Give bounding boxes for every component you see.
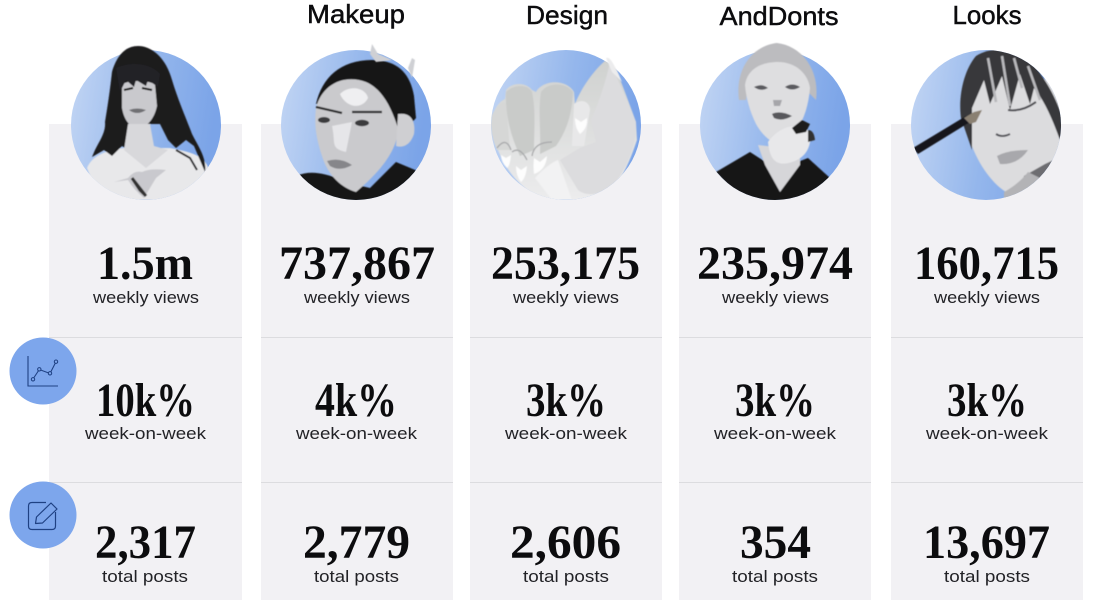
stat column 3: total posts [523, 567, 609, 586]
panel: column 3 [470, 124, 662, 600]
icon: line chart [10, 338, 76, 404]
stat column 5: 13,697 [923, 516, 1050, 569]
stat column 2: total posts [314, 567, 399, 586]
stat column 2: weekly views [303, 288, 410, 307]
stat column 1: week-on-week [84, 424, 207, 443]
finger nail tip [606, 58, 622, 82]
stat column 3 [491, 237, 640, 586]
photo: woman having lipstick applied [700, 43, 850, 202]
stat column 5 [914, 237, 1059, 586]
stat column 2: 737,867 [279, 237, 435, 290]
stat column 4: 3k% [735, 374, 815, 427]
stat column 1: 2,317 [95, 516, 196, 569]
stat column 1: weekly views [92, 288, 199, 307]
stat column 5: weekly views [933, 288, 1040, 307]
heading: Looks: Looks [952, 0, 1022, 30]
panel: column 1 [49, 124, 242, 600]
heading: AndDonts: AndDonts [720, 1, 838, 31]
stat column 2: week-on-week [295, 424, 418, 443]
photo: hand with heart nail art [491, 50, 641, 200]
panel: column 5 [891, 124, 1083, 600]
stat column 3: 253,175 [491, 237, 640, 290]
stat column 3: 2,606 [510, 516, 621, 569]
photo: woman with dark wavy hair [71, 46, 221, 200]
photo: woman with eye-makeup brush [911, 50, 1068, 200]
heading: Design: Design [526, 0, 608, 30]
stat column 5: week-on-week [925, 424, 1049, 443]
stat column 3: weekly views [512, 288, 619, 307]
stat column 4: week-on-week [713, 424, 837, 443]
stat column 4: 354 [740, 516, 811, 569]
stat column 5: 3k% [947, 374, 1027, 427]
stat column 5: total posts [944, 567, 1030, 586]
stat column 2: 4k% [315, 374, 397, 427]
stat column 2: 2,779 [303, 516, 410, 569]
stat column 1: 1.5m [97, 237, 193, 290]
icon: pencil and square [10, 482, 76, 548]
stat column 4: 235,974 [697, 237, 853, 290]
stat column 4 [697, 237, 853, 586]
stat column 2 [279, 237, 435, 586]
stat column 4: total posts [732, 567, 818, 586]
stat column 4: weekly views [721, 288, 829, 307]
stat column 1 [84, 237, 207, 586]
hair clips [370, 44, 415, 78]
stat column 1: total posts [102, 567, 188, 586]
photo: woman with slicked-back hair [281, 44, 431, 210]
panel: column 4 [679, 124, 871, 600]
stat column 1: 10k% [96, 374, 195, 427]
stat column 3: week-on-week [504, 424, 628, 443]
stat column 3: 3k% [526, 374, 606, 427]
stat column 5: 160,715 [914, 237, 1059, 290]
panel: column 2 [261, 124, 453, 600]
